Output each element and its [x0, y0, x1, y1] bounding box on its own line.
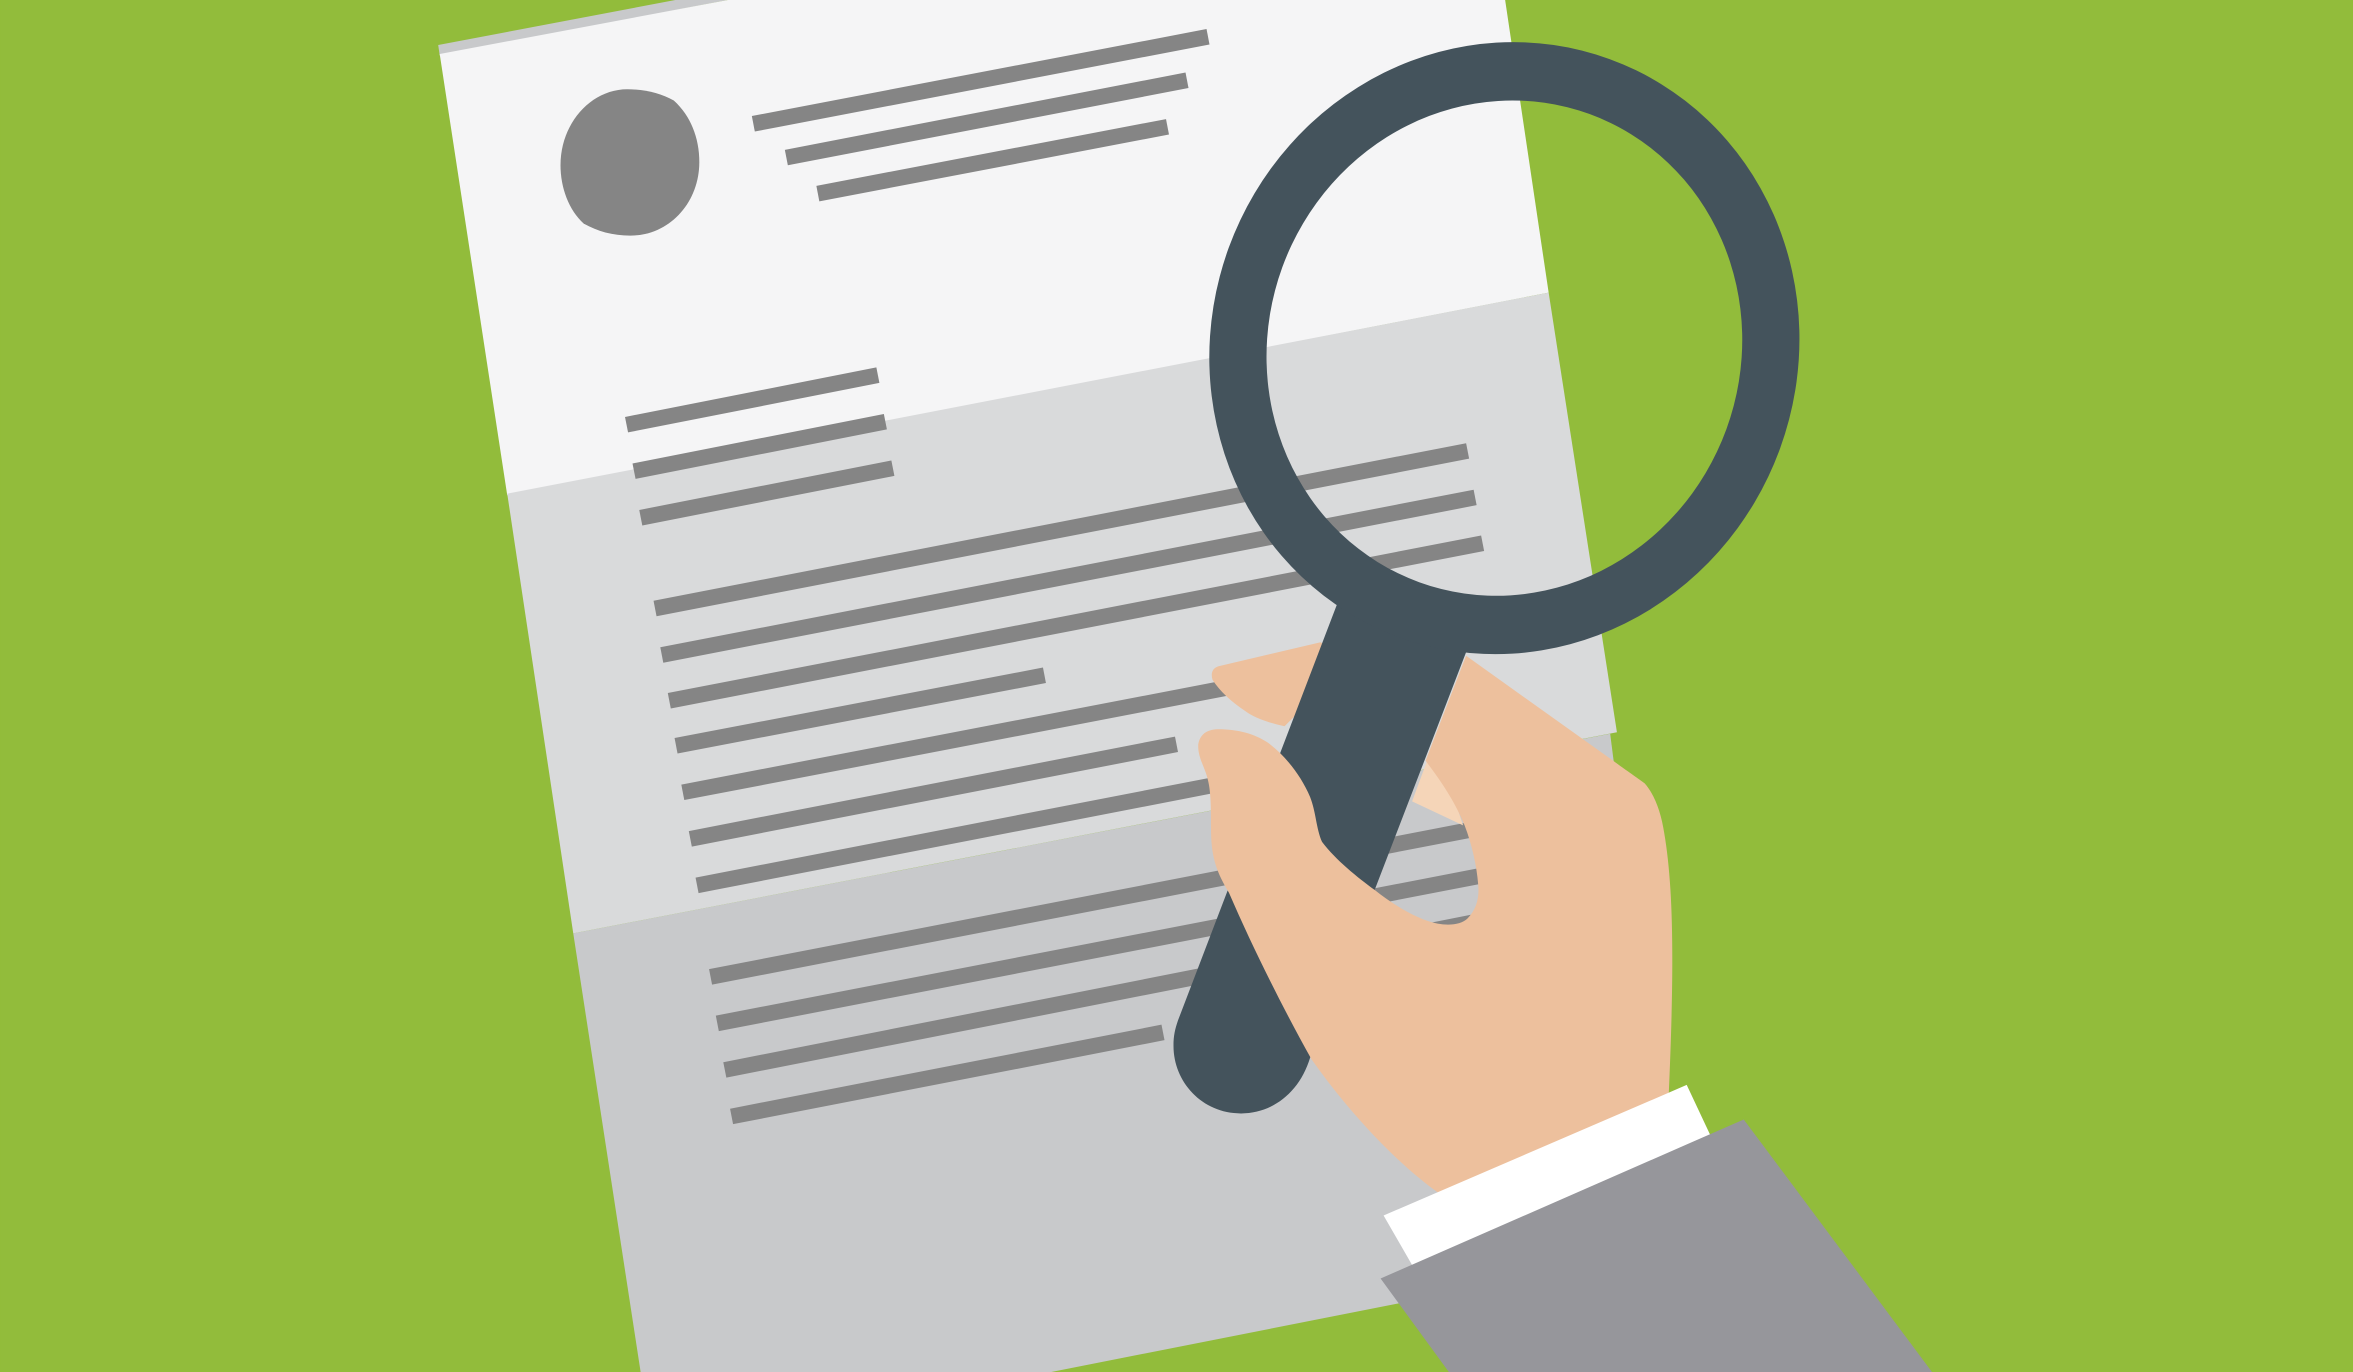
lower text lines [711, 828, 1486, 1116]
magnifier ring [1123, 0, 1885, 738]
paper white section [440, 0, 1549, 495]
paper top edge strip [438, 0, 728, 56]
magnifier handle [1173, 600, 1468, 1113]
header text lines [753, 37, 1208, 194]
icon: magnifying glass [1123, 0, 1885, 1113]
panel: document sheet [438, 0, 1651, 1372]
icon: hand [1198, 656, 1672, 1194]
paper lower shaded section [573, 734, 1651, 1372]
icon: grey jacket sleeve [1381, 1119, 1933, 1372]
body text lines [655, 451, 1483, 885]
icon: finger behind handle [1212, 642, 1351, 726]
icon: inner palm highlight [1412, 761, 1463, 825]
icon: avatar circle [561, 89, 699, 236]
icon: white shirt cuff [1384, 1085, 1711, 1265]
paper middle grey section [507, 293, 1617, 933]
section text lines [627, 375, 893, 518]
